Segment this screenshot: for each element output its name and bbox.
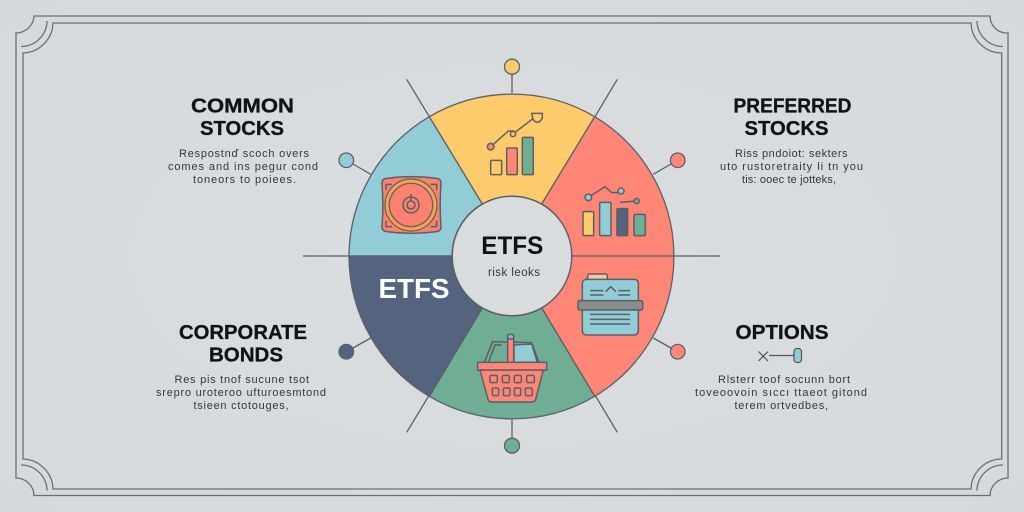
center hub (452, 196, 572, 316)
heading: common stocks (191, 96, 294, 140)
segment: yellow (429, 94, 595, 204)
icon: document folder (578, 274, 643, 335)
body: preferred stocks: tis: ooec te jotteks, (742, 174, 836, 186)
body: options (695, 374, 867, 412)
body: corporate bonds (156, 374, 326, 412)
heading: options: OPTIONS (736, 322, 828, 344)
body: corporate bonds: srepro uroteroo ufturoesmtond (156, 387, 326, 399)
block: corporate bonds (156, 322, 326, 412)
body: common stocks: Respostnď scoch overs (179, 148, 310, 160)
body: options: Rlsterr toof socunn bort (718, 374, 850, 386)
body: corporate bonds: Res pis tnof sucune tsot (174, 374, 309, 386)
body: common stocks (168, 148, 318, 186)
node: lower left navy (339, 338, 371, 359)
node connectors (339, 59, 685, 453)
heading: common stocks: COMMON (191, 96, 294, 118)
segment: blue (349, 117, 482, 256)
node: lower right salmon (653, 338, 685, 359)
block: common stocks (168, 96, 318, 186)
heading: preferred stocks: STOCKS (744, 118, 828, 140)
node: upper right salmon (653, 153, 685, 174)
heading: corporate bonds (179, 322, 307, 366)
body: options: toveoovoin sıccı ttaeot gitond (695, 387, 867, 399)
body: preferred stocks: uto rustoretraity li tn you (720, 161, 863, 173)
heading: preferred stocks: PREFERRED (734, 96, 852, 118)
body: preferred stocks: Riss pndoiot: sekters (735, 148, 848, 160)
block: options (695, 322, 867, 412)
segment label ETFS: ETFS (378, 273, 450, 304)
block: preferred stocks (720, 96, 863, 186)
heading: common stocks: STOCKS (200, 118, 284, 140)
segment: salmon right (542, 117, 674, 396)
heading: corporate bonds: CORPORATE (179, 322, 307, 344)
icon: option slider (758, 348, 802, 362)
icon: shopping basket (478, 334, 547, 402)
body: preferred stocks (720, 148, 863, 186)
icon: bar chart with trend (583, 187, 645, 236)
center label ETFS: ETFS (481, 232, 543, 260)
node: bottom green (504, 419, 520, 453)
center sublabel: risk leoks (488, 267, 540, 279)
body: options: terem ortvedbes, (734, 400, 828, 412)
heading: corporate bonds: BONDS (209, 344, 283, 366)
donut chart (349, 94, 674, 419)
spoke lines (303, 79, 720, 432)
icon: growth chart (487, 113, 542, 175)
segment: green (429, 308, 595, 419)
heading: preferred stocks (734, 96, 852, 140)
node: top yellow (504, 59, 520, 93)
body: common stocks: comes and ins pegur cond (168, 161, 318, 173)
body: corporate bonds: tsieen ctotouges, (194, 400, 288, 412)
segment: navy (349, 256, 482, 396)
node: upper left blue (339, 153, 371, 174)
icon: target dial (382, 177, 441, 233)
body: common stocks: toneors to poiees. (193, 174, 296, 186)
